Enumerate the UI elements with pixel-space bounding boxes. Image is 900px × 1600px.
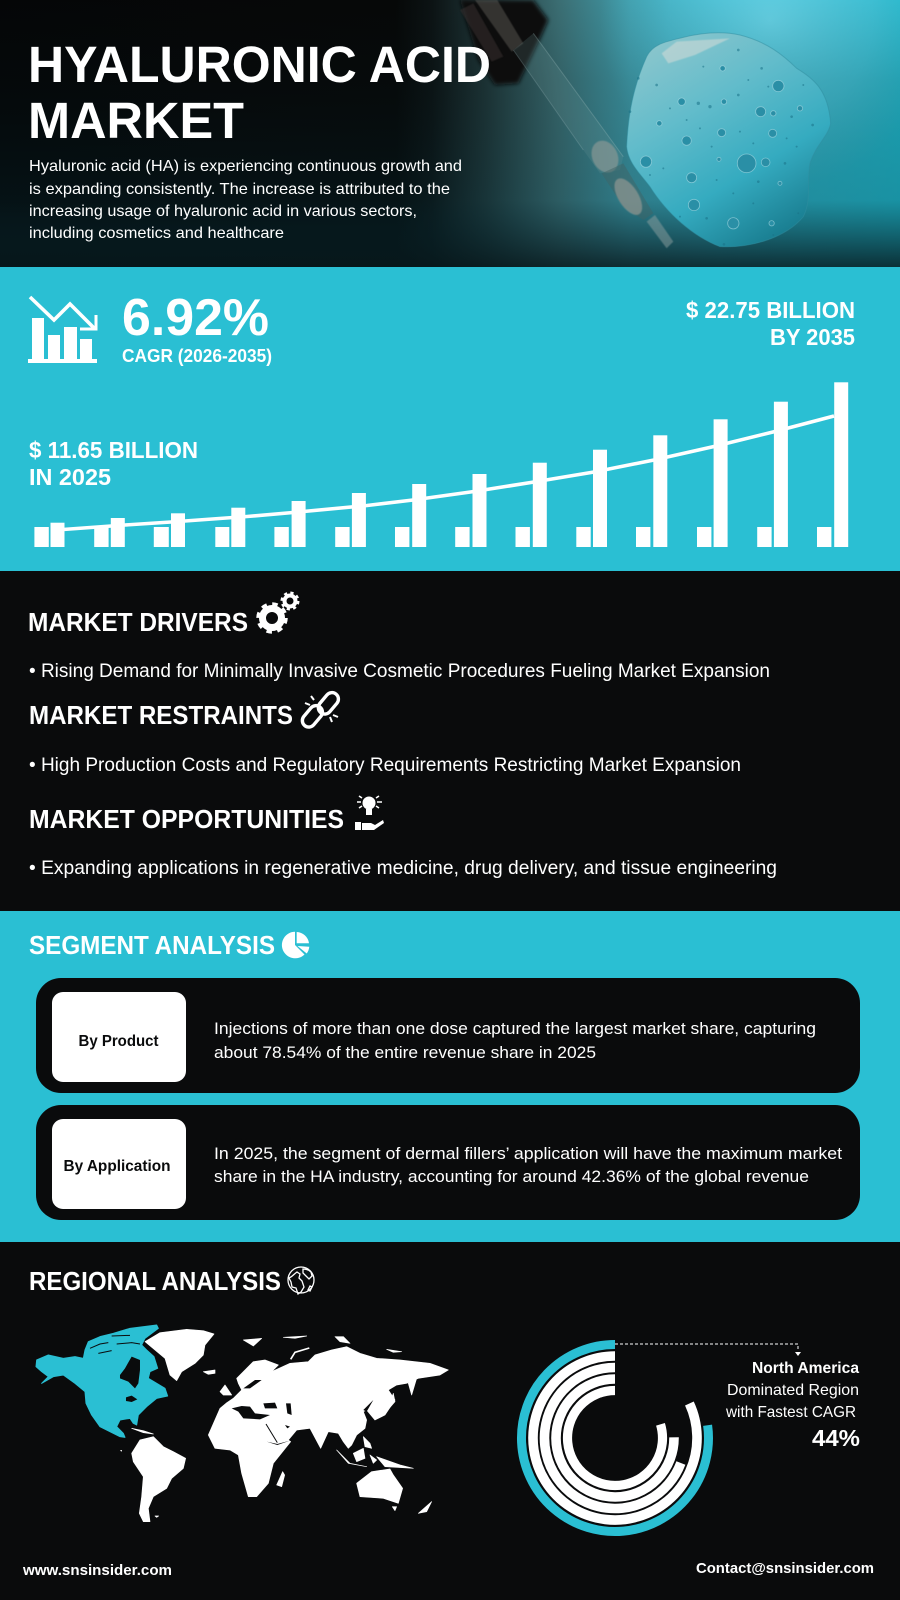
panel: regional analysis: [0, 1242, 900, 1600]
region: Europe, Africa, Asia, Oceania: [203, 1336, 448, 1513]
CAGR value: 6.92%: [122, 289, 269, 347]
2025 value: IN 2025: [29, 464, 111, 490]
panel: header with photo background: [0, 0, 900, 267]
CAGR label: CAGR (2026-2035): [122, 346, 272, 366]
icon: globe: [288, 1267, 314, 1294]
card: by application: By Application: [64, 1158, 170, 1175]
2035 value: BY 2035: [770, 324, 855, 350]
text: opportunities item: • Expanding applications in regenerative medicine, drug delivery, and tissue engineering: [29, 858, 777, 879]
callout: North America: with Fastest CAGR: [725, 1404, 856, 1421]
icon: dropper pipette: [460, 0, 673, 248]
heading: segment analysis: SEGMENT ANALYSIS: [29, 930, 275, 960]
2035 value: [686, 297, 855, 350]
callout: North America: North America: [752, 1360, 859, 1377]
region: North America highlighted: [36, 1325, 168, 1437]
callout: North America: Dominated Region: [727, 1382, 859, 1399]
2025 value: $ 11.65 BILLION: [29, 437, 198, 463]
icon: gel droplet with bubbles: [627, 33, 831, 247]
text block: intro: [29, 158, 462, 242]
icon: gears: [258, 593, 298, 632]
heading: regional analysis: REGIONAL ANALYSIS: [29, 1266, 281, 1296]
arrow: callout leader: [615, 1344, 801, 1356]
seas: [232, 1380, 373, 1445]
card: by application: share in the HA industry, accounting for around 42.36% of the global revenue: [214, 1167, 809, 1186]
region: Americas and Greenland in white: [121, 1329, 214, 1522]
2025 value: [29, 437, 198, 490]
panel: drivers, restraints, opportunities: [0, 571, 900, 911]
title: MARKET: [28, 92, 244, 149]
text: restraints item: • High Production Costs and Regulatory Requirements Restricting Market Expansion: [29, 755, 741, 776]
card: by product: By Product: [78, 1033, 159, 1050]
panel: segment analysis: [0, 911, 900, 1242]
icon: broken link: [300, 690, 341, 730]
icon: declining chart: [28, 297, 97, 363]
2035 value: $ 22.75 BILLION: [686, 297, 855, 323]
text block: intro: increasing usage of hyaluronic acid in various sectors,: [29, 203, 417, 220]
text block: intro: is expanding consistently. The increase is attributed to the: [29, 181, 450, 198]
text block: intro: including cosmetics and healthcare: [29, 225, 284, 242]
icon: hand with lightbulb: [355, 796, 384, 830]
bar chart: [34, 382, 848, 547]
text: drivers item: • Rising Demand for Minimally Invasive Cosmetic Procedures Fueling Market Expansion: [29, 661, 770, 682]
world map: [36, 1325, 448, 1522]
trend line: [63, 416, 834, 530]
callout: North America: 44%: [812, 1425, 860, 1451]
title: HYALURONIC ACID: [28, 36, 491, 93]
card: by application: In 2025, the segment of dermal fillers’ application will have the maximum market: [214, 1144, 842, 1163]
heading: market opportunities: MARKET OPPORTUNITIES: [29, 804, 344, 834]
heading: market restraints: MARKET RESTRAINTS: [29, 700, 293, 730]
radial chart: [521, 1344, 708, 1532]
card: by product: about 78.54% of the entire revenue share in 2025: [214, 1043, 596, 1062]
title: [28, 36, 491, 149]
footer: website: www.snsinsider.com: [22, 1562, 172, 1579]
footer: contact: Contact@snsinsider.com: [696, 1560, 874, 1577]
callout: North America: [725, 1360, 860, 1451]
icon: pie chart: [282, 932, 309, 958]
text block: intro: Hyaluronic acid (HA) is experiencing continuous growth and: [29, 158, 462, 175]
card: by product: [36, 978, 860, 1093]
card: by application: [36, 1105, 860, 1220]
panel: market size: [0, 267, 900, 571]
card: by product: Injections of more than one dose captured the largest market share, capturing: [214, 1019, 816, 1038]
heading: market drivers: MARKET DRIVERS: [28, 607, 248, 637]
